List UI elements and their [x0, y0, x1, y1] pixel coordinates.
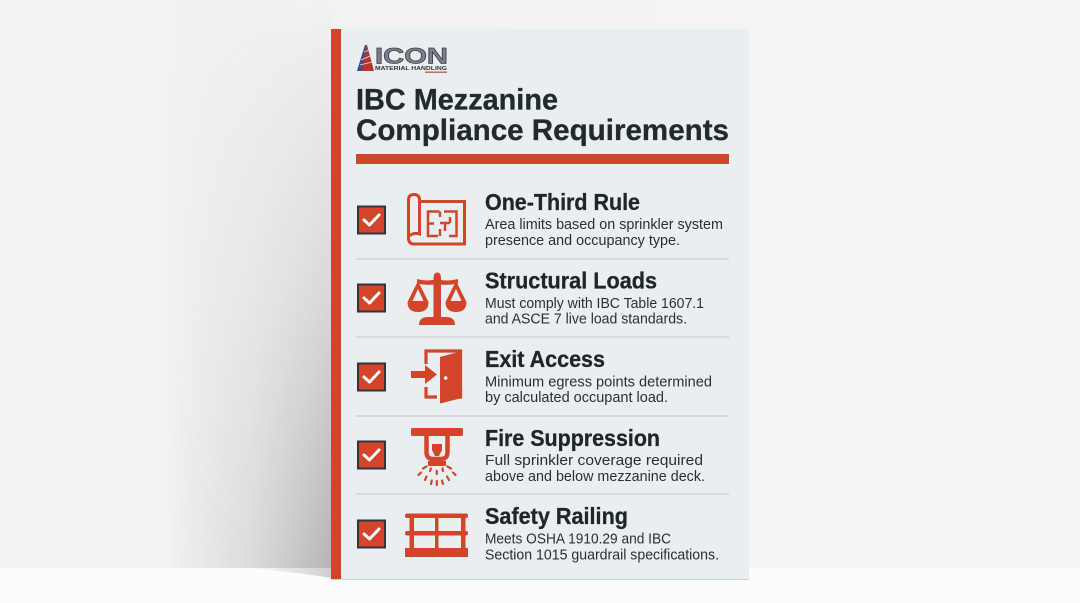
icon: blueprint — [408, 194, 464, 244]
row: Safety Railing — [358, 503, 719, 564]
checkbox — [358, 520, 385, 548]
text: One-Third Rule: presence and occupancy type. — [485, 232, 680, 249]
title: IBC Mezzanine — [356, 84, 558, 116]
row: Fire Suppression — [358, 425, 705, 485]
text: Exit Access: by calculated occupant load. — [485, 389, 668, 406]
text: Exit Access: Exit Access — [485, 346, 605, 372]
text: Structural Loads: Must comply with IBC Table 1607.1 — [485, 295, 704, 312]
row: Exit Access — [358, 346, 712, 406]
title rule — [356, 154, 729, 164]
icon: exit door with arrow — [411, 351, 462, 404]
text: Fire Suppression: Full sprinkler coverage required — [485, 452, 703, 469]
text: Structural Loads — [485, 268, 704, 328]
icon: safety railing — [405, 514, 468, 557]
icon: scales of justice — [408, 272, 466, 325]
text: Fire Suppression: above and below mezzanine deck. — [485, 468, 705, 485]
text: One-Third Rule: Area limits based on sprinkler system — [485, 216, 723, 233]
title: Compliance Requirements — [356, 114, 729, 147]
text: One-Third Rule — [485, 189, 723, 249]
text: Exit Access: Minimum egress points determined — [485, 374, 712, 390]
logo: ICON Material Handling: MATERIAL HANDLING — [375, 66, 447, 72]
checkbox — [358, 206, 385, 234]
text: Structural Loads: and ASCE 7 live load standards. — [485, 310, 687, 328]
text: Fire Suppression: Fire Suppression — [485, 425, 660, 451]
poster panel — [331, 29, 749, 580]
text: Safety Railing: Safety Railing — [485, 503, 628, 529]
icon: fire sprinkler — [411, 428, 463, 485]
text: Structural Loads: Structural Loads — [485, 268, 657, 294]
logo: ICON Material Handling: ICON — [375, 44, 448, 68]
row: One-Third Rule — [358, 189, 723, 249]
text: One-Third Rule: One-Third Rule — [485, 189, 640, 215]
text: Safety Railing: Section 1015 guardrail specifications. — [485, 546, 719, 564]
text: Exit Access — [485, 346, 712, 406]
text: Safety Railing — [485, 503, 719, 564]
row: Structural Loads — [358, 268, 704, 328]
red side strip — [331, 29, 341, 579]
title — [356, 84, 729, 147]
checkbox — [358, 364, 385, 390]
checkbox — [358, 442, 385, 468]
checkbox — [358, 284, 385, 312]
text: Safety Railing: Meets OSHA 1910.29 and IBC — [485, 530, 671, 548]
text: Fire Suppression — [485, 425, 705, 485]
logo: ICON Material Handling — [357, 44, 448, 73]
